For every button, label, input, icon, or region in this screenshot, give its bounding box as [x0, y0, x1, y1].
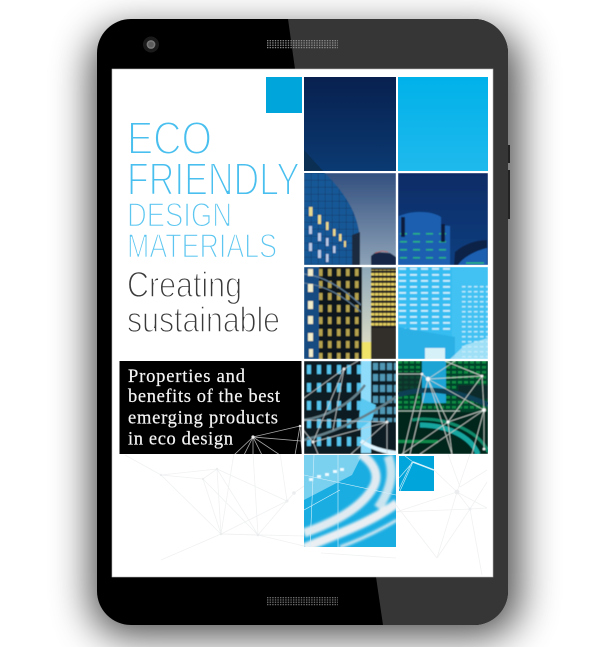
tablet drop shadow: [91, 30, 519, 636]
subtitle: design materials: [127, 196, 277, 266]
title: eco friendly: ECO: [127, 112, 212, 164]
solid blue tile: [398, 77, 488, 171]
title: eco friendly: [127, 112, 300, 205]
faint network background: [125, 453, 487, 575]
photo tile: green network: [398, 361, 488, 454]
box text: in eco design: [128, 430, 233, 450]
title: eco friendly: FRIENDLY: [127, 153, 300, 205]
subtitle: design materials: DESIGN: [127, 196, 232, 234]
tablet grey reflection: [288, 19, 508, 625]
box text: [128, 367, 281, 450]
tablet black body: [97, 19, 508, 625]
side button upper: [507, 145, 510, 163]
small blue square bottom: [399, 456, 434, 491]
photo tile: dark sky: [304, 77, 396, 171]
tagline: creating sustainable: Creating: [127, 264, 242, 305]
photo tile: bright blue towers: [398, 267, 488, 359]
tablet device: [97, 19, 510, 625]
box network lines: [234, 425, 302, 455]
tagline: creating sustainable: [127, 264, 280, 340]
box text: emerging products: [128, 408, 278, 428]
photo tile: tower lights at dusk: [304, 267, 396, 359]
front camera: [143, 36, 159, 52]
top speaker grille: [267, 40, 338, 49]
photo tile: blue office building: [398, 173, 488, 265]
small blue square top: [266, 77, 302, 113]
photo tile: night highway building: [300, 361, 396, 454]
box text: Properties and: [128, 367, 246, 387]
photo tile: light trails: [304, 454, 397, 548]
subtitle: design materials: MATERIALS: [127, 228, 277, 266]
bottom speaker grille: [267, 597, 338, 606]
tagline: creating sustainable: sustainable: [127, 299, 280, 340]
screen: [112, 69, 493, 577]
black subtitle box: [120, 361, 302, 455]
box text: benefits of the best: [128, 387, 281, 407]
photo tile: curved tower and dusk sky: [304, 170, 396, 265]
side button lower: [507, 170, 510, 219]
